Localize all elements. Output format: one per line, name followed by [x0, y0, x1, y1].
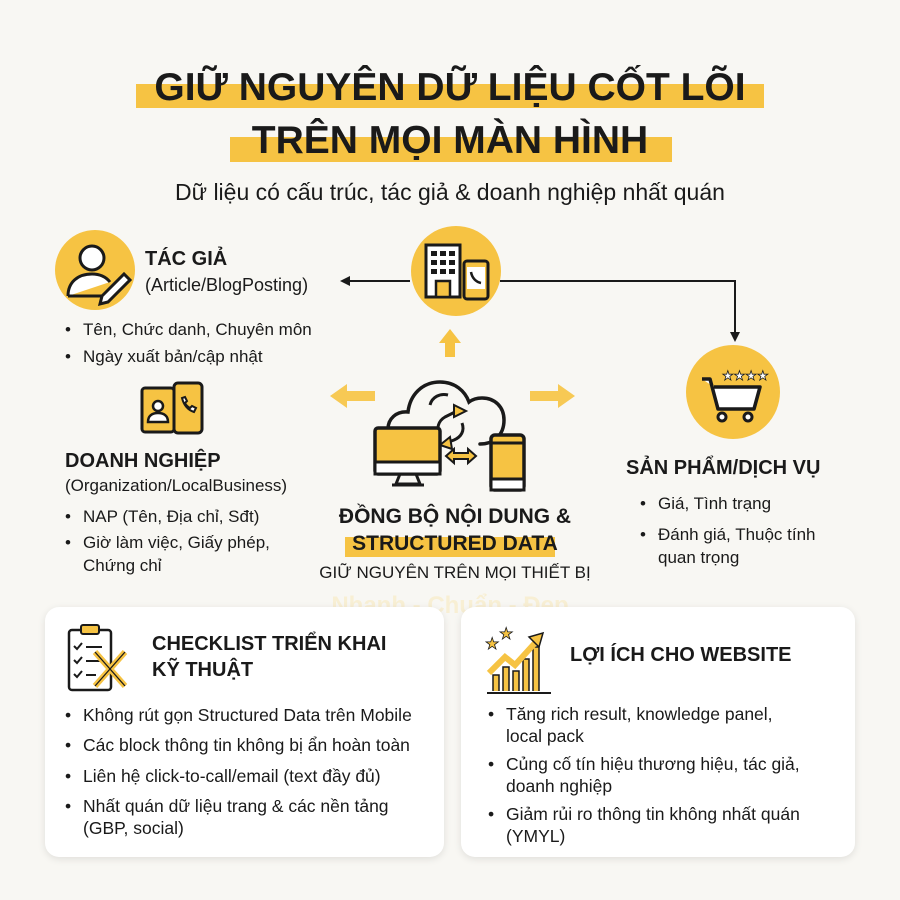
benefits bullets: Củng cố tín hiệu thương hiệu, tác giả, doanh nghiệp	[506, 754, 800, 796]
watermark: Nhanh - Chuẩn - Đẹp	[331, 592, 569, 619]
icon: business contact	[140, 382, 204, 434]
icon: clipboard wrench	[68, 624, 128, 692]
author heading: (Article/BlogPosting)	[145, 275, 308, 295]
business heading: DOANH NGHIỆP	[65, 450, 221, 472]
benefits heading: LỢI ÍCH CHO WEBSITE	[570, 644, 792, 666]
center caption	[319, 504, 591, 582]
yellow arrows	[330, 329, 575, 408]
title	[136, 65, 764, 162]
center caption: GIỮ NGUYÊN TRÊN MỌI THIẾT BỊ	[319, 563, 591, 582]
title: TRÊN MỌI MÀN HÌNH	[252, 119, 648, 162]
author heading	[145, 246, 308, 295]
icon: growth chart: ★	[485, 634, 499, 653]
benefits bullets: Giảm rủi ro thông tin không nhất quán (YMYL)	[506, 804, 800, 846]
checklist heading: CHECKLIST TRIỂN KHAI	[152, 633, 386, 655]
title: GIỮ NGUYÊN DỮ LIỆU CỐT LÕI	[154, 66, 746, 109]
author bullets	[66, 320, 312, 366]
connector arrows	[340, 276, 740, 342]
checklist bullets: Các block thông tin không bị ẩn hoàn toàn	[83, 735, 410, 755]
subtitle: Dữ liệu có cấu trúc, tác giả & doanh nghiệp nhất quán	[175, 179, 725, 205]
author bullets: Tên, Chức danh, Chuyên môn	[83, 320, 312, 339]
center caption: STRUCTURED DATA	[352, 532, 558, 555]
checklist heading	[152, 632, 386, 681]
checklist bullets: Liên hệ click-to-call/email (text đầy đủ)	[83, 766, 381, 786]
checklist bullets: Không rút gọn Structured Data trên Mobile	[83, 705, 412, 725]
benefits bullets	[488, 704, 800, 846]
icon: cart circle: ★★★★	[722, 369, 769, 384]
icon: cloud sync devices	[373, 380, 526, 492]
business bullets: NAP (Tên, Địa chỉ, Sđt)	[83, 507, 259, 526]
product heading: SẢN PHẨM/DỊCH VỤ	[626, 457, 820, 479]
icon: author	[55, 230, 135, 310]
icon: cart circle	[686, 345, 780, 439]
icon: growth chart	[485, 625, 551, 694]
product bullets: Giá, Tình trạng	[658, 494, 771, 513]
product bullets	[640, 494, 816, 567]
checklist heading: KỸ THUẬT	[152, 659, 253, 681]
checklist bullets	[66, 705, 412, 838]
business heading: (Organization/LocalBusiness)	[65, 476, 287, 495]
center caption: ĐỒNG BỘ NỘI DUNG &	[339, 505, 571, 528]
icon: building circle	[411, 226, 501, 316]
business bullets: Giờ làm việc, Giấy phép, Chứng chỉ	[83, 533, 270, 575]
panel: checklist	[45, 607, 444, 857]
checklist bullets: Nhất quán dữ liệu trang & các nền tảng (GBP, social)	[83, 796, 389, 838]
product bullets: Đánh giá, Thuộc tính quan trọng	[658, 525, 816, 567]
benefits bullets: Tăng rich result, knowledge panel, local pack	[506, 704, 773, 746]
panel: benefits	[461, 607, 855, 857]
business heading	[65, 448, 287, 495]
business bullets	[66, 507, 270, 575]
author heading: TÁC GIẢ	[145, 248, 227, 270]
author bullets: Ngày xuất bản/cập nhật	[83, 347, 263, 366]
